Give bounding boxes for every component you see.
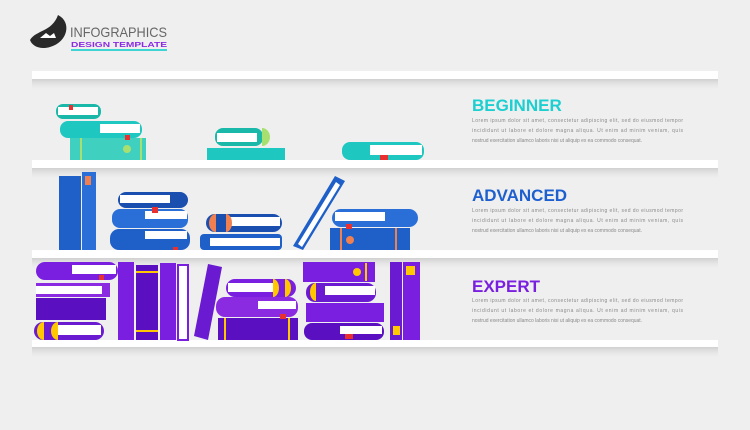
books: expert	[34, 262, 420, 340]
text: advanced: nostrud exercitation ullamco laboris nisi ut aliquip ex ea commodo consequat.	[472, 228, 642, 234]
text: beginner: BEGINNER	[472, 96, 562, 115]
text: advanced	[472, 186, 684, 234]
logo: DESIGN TEMPLATE	[71, 42, 167, 49]
text: expert: incididunt ut labore et dolore magna aliqua. Ut enim ad minim veniam, quis	[472, 308, 684, 314]
text: expert	[472, 277, 684, 324]
text: beginner: nostrud exercitation ullamco laboris nisi ut aliquip ex ea commodo consequat.	[472, 138, 642, 144]
text: expert: Lorem ipsum dolor sit amet, consectetur adipiscing elit, sed do eiusmod tempor	[472, 298, 683, 304]
books: advanced	[59, 172, 418, 250]
text: beginner: incididunt ut labore et dolore magna aliqua. Ut enim ad minim veniam, quis	[472, 128, 684, 134]
text: expert: nostrud exercitation ullamco laboris nisi ut aliquip ex ea commodo consequat.	[472, 318, 642, 324]
logo	[30, 15, 167, 51]
text: expert: EXPERT	[472, 277, 541, 296]
text: beginner	[472, 96, 684, 144]
logo text: INFOGRAPHICS	[70, 24, 167, 40]
books: beginner	[56, 104, 424, 160]
text: advanced: ADVANCED	[472, 186, 567, 205]
text: advanced: Lorem ipsum dolor sit amet, consectetur adipiscing elit, sed do eiusmod tempor	[472, 208, 683, 214]
text: advanced: incididunt ut labore et dolore magna aliqua. Ut enim ad minim veniam, quis	[472, 218, 684, 224]
shelves	[32, 71, 718, 359]
text: beginner: Lorem ipsum dolor sit amet, consectetur adipiscing elit, sed do eiusmod tempor	[472, 118, 683, 124]
icon: logo mark	[30, 15, 66, 48]
